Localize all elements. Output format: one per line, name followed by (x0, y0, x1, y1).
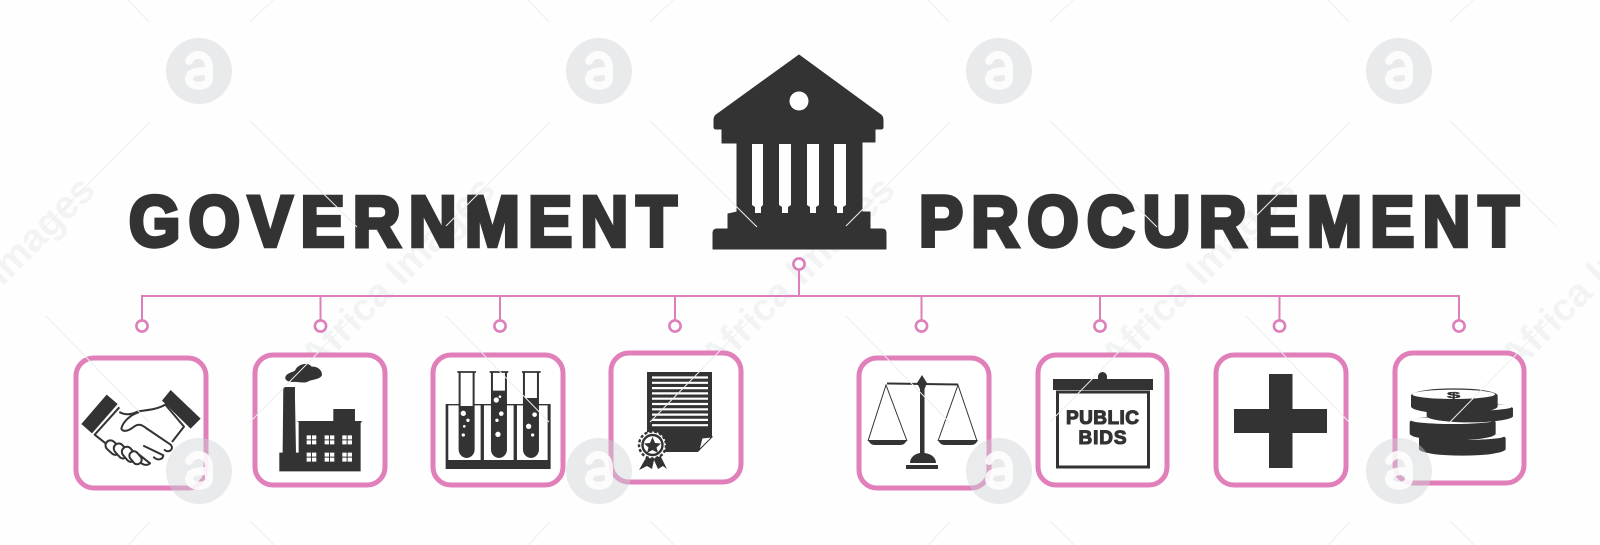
icon: government building (713, 55, 886, 249)
icon: public bids board: BIDS (1078, 428, 1126, 449)
panel: scales (859, 358, 989, 488)
connector tree (136, 258, 1465, 332)
icon: coin stack: $ (1447, 391, 1460, 400)
panel: public bids (1038, 355, 1167, 485)
watermark badges (166, 38, 1432, 504)
title: Procurement: PROCUREMENT (919, 182, 1519, 262)
panel: certificate (611, 353, 741, 482)
panel: handshake (76, 358, 206, 488)
panel: plus (1216, 355, 1346, 485)
icon: balance scales (868, 375, 978, 469)
icon: handshake (81, 390, 201, 466)
text: Africa Images (292, 168, 503, 379)
icon: plus (1234, 374, 1327, 468)
icon: public bids board (1053, 372, 1153, 467)
text: Africa Images (1092, 168, 1303, 379)
panel: factory (255, 355, 385, 485)
icon: factory (279, 364, 362, 471)
panel: coins (1395, 353, 1524, 483)
icon: test tubes in rack (446, 372, 551, 469)
text: Africa Images (692, 168, 903, 379)
icon: certificate document (639, 372, 712, 470)
panel: test tubes (433, 355, 563, 485)
icon: public bids board: PUBLIC (1066, 408, 1139, 429)
title: Government: GOVERNMENT (129, 182, 677, 262)
